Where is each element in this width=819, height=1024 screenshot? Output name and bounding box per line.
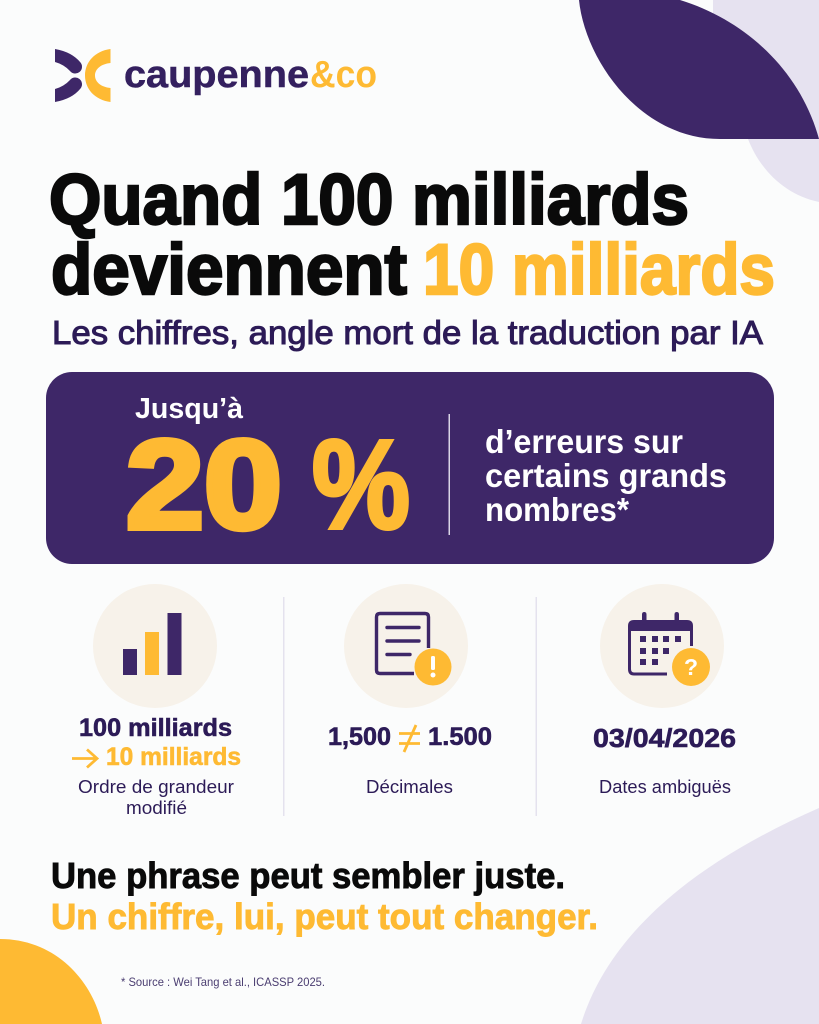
source note: * Source : Wei Tang et al., ICASSP 2025. <box>121 975 325 989</box>
closing line 2: Un chiffre, lui, peut tout changer. <box>51 896 598 937</box>
title <box>49 161 775 310</box>
column: decimals <box>328 584 492 797</box>
closing statement <box>51 855 598 937</box>
title line 1: Quand 100 milliards <box>49 161 689 240</box>
value: 1,500: 1,500 <box>328 723 391 751</box>
value: 10 milliards: 10 milliards <box>106 743 241 771</box>
value: date: 03/04/2026 <box>593 723 736 753</box>
value: 100 milliards: 100 milliards <box>79 714 232 742</box>
stat description <box>485 423 727 528</box>
title highlight: 10 milliards <box>423 231 775 310</box>
label: decimals: Décimales <box>366 777 453 797</box>
logo wordmark suffix: &co <box>310 54 377 96</box>
icon: calendar with question mark: ? <box>684 654 698 680</box>
value: 1.500: 1.500 <box>428 723 492 751</box>
icon: not equal <box>399 725 420 752</box>
closing line 1: Une phrase peut sembler juste. <box>51 855 565 896</box>
logo <box>55 49 377 102</box>
label: order of magnitude: modifié <box>126 798 187 818</box>
stat description: nombres* <box>485 491 629 528</box>
stat description: certains grands <box>485 457 727 494</box>
stat percent sign: % <box>312 414 410 555</box>
label: ambiguous dates: Dates ambiguës <box>599 777 731 797</box>
decorative shape: bottom right <box>581 808 819 1024</box>
column: order of magnitude <box>72 584 241 818</box>
icon: bar chart <box>93 584 217 708</box>
stat description: d’erreurs sur <box>485 423 683 460</box>
label: order of magnitude <box>78 777 234 818</box>
logo mark <box>55 49 110 102</box>
label: order of magnitude: Ordre de grandeur <box>78 777 234 797</box>
icon: document with warning <box>344 584 468 708</box>
arrow <box>72 750 97 768</box>
stat prefix: Jusqu’à <box>135 393 244 425</box>
panel: key statistic <box>46 372 774 564</box>
logo wordmark: caupenne <box>124 54 309 96</box>
decorative shape: bottom left <box>0 939 102 1024</box>
subtitle: Les chiffres, angle mort de la traduction par IA <box>52 314 763 351</box>
icon: calendar with question mark <box>600 584 724 708</box>
stat number: 20 <box>126 414 282 555</box>
decorative shapes: top right <box>579 0 819 202</box>
column: dates <box>593 584 736 797</box>
title line 2: deviennent <box>51 231 407 310</box>
